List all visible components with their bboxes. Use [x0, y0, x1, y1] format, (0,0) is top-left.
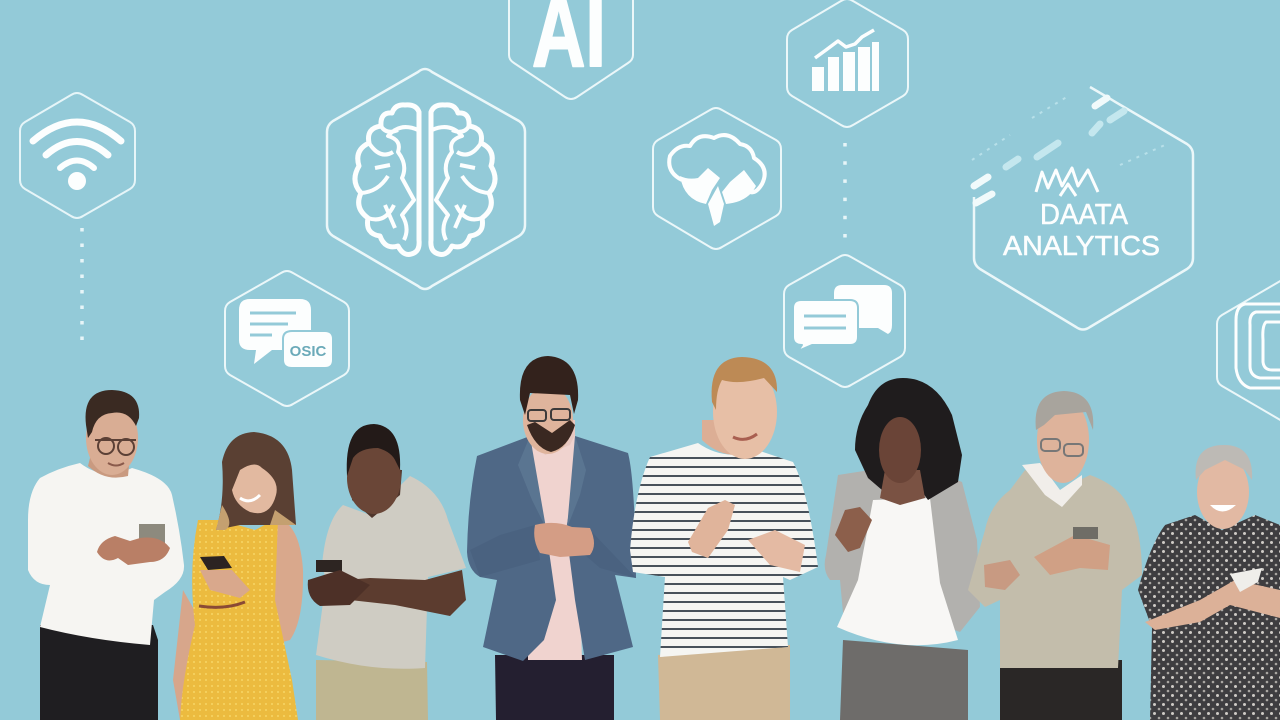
icon group: hexagon icons: [20, 0, 1280, 421]
person 1: man in white sweater: [28, 390, 184, 720]
dotted connector: chart: [843, 143, 847, 240]
label: data: DAATA: [1040, 199, 1129, 231]
person 6: woman with curly hair and cardigan: [825, 378, 980, 720]
person 2: woman in yellow dress: [173, 432, 303, 720]
icon: bar chart hexagon: [787, 0, 908, 127]
person 3: man in beige polo: [308, 424, 466, 720]
icon: chat bubbles hexagon: [784, 255, 905, 387]
icon: data analytics hexagon: [972, 87, 1193, 330]
stripes: [630, 458, 820, 647]
icon: partial hexagon at right edge: [1217, 280, 1280, 421]
label: analytics: ANALYTICS: [1003, 230, 1160, 261]
icon: AI hexagon: [509, 0, 633, 99]
person 7: older man in beige sweater: [968, 391, 1142, 720]
person 8: older woman in patterned dress: [1138, 445, 1280, 720]
dotted connector: wifi: [80, 228, 84, 340]
icon: chat with label hexagon: [225, 271, 349, 406]
person 4: man in navy blazer: [467, 356, 636, 720]
label: OSIC: OSIC: [290, 343, 326, 360]
icon: cloud brain hexagon: [653, 108, 781, 249]
person 5: man in striped shirt: [630, 357, 820, 720]
icon: brain hexagon: [327, 69, 525, 289]
icon: wifi hexagon: [20, 93, 135, 218]
